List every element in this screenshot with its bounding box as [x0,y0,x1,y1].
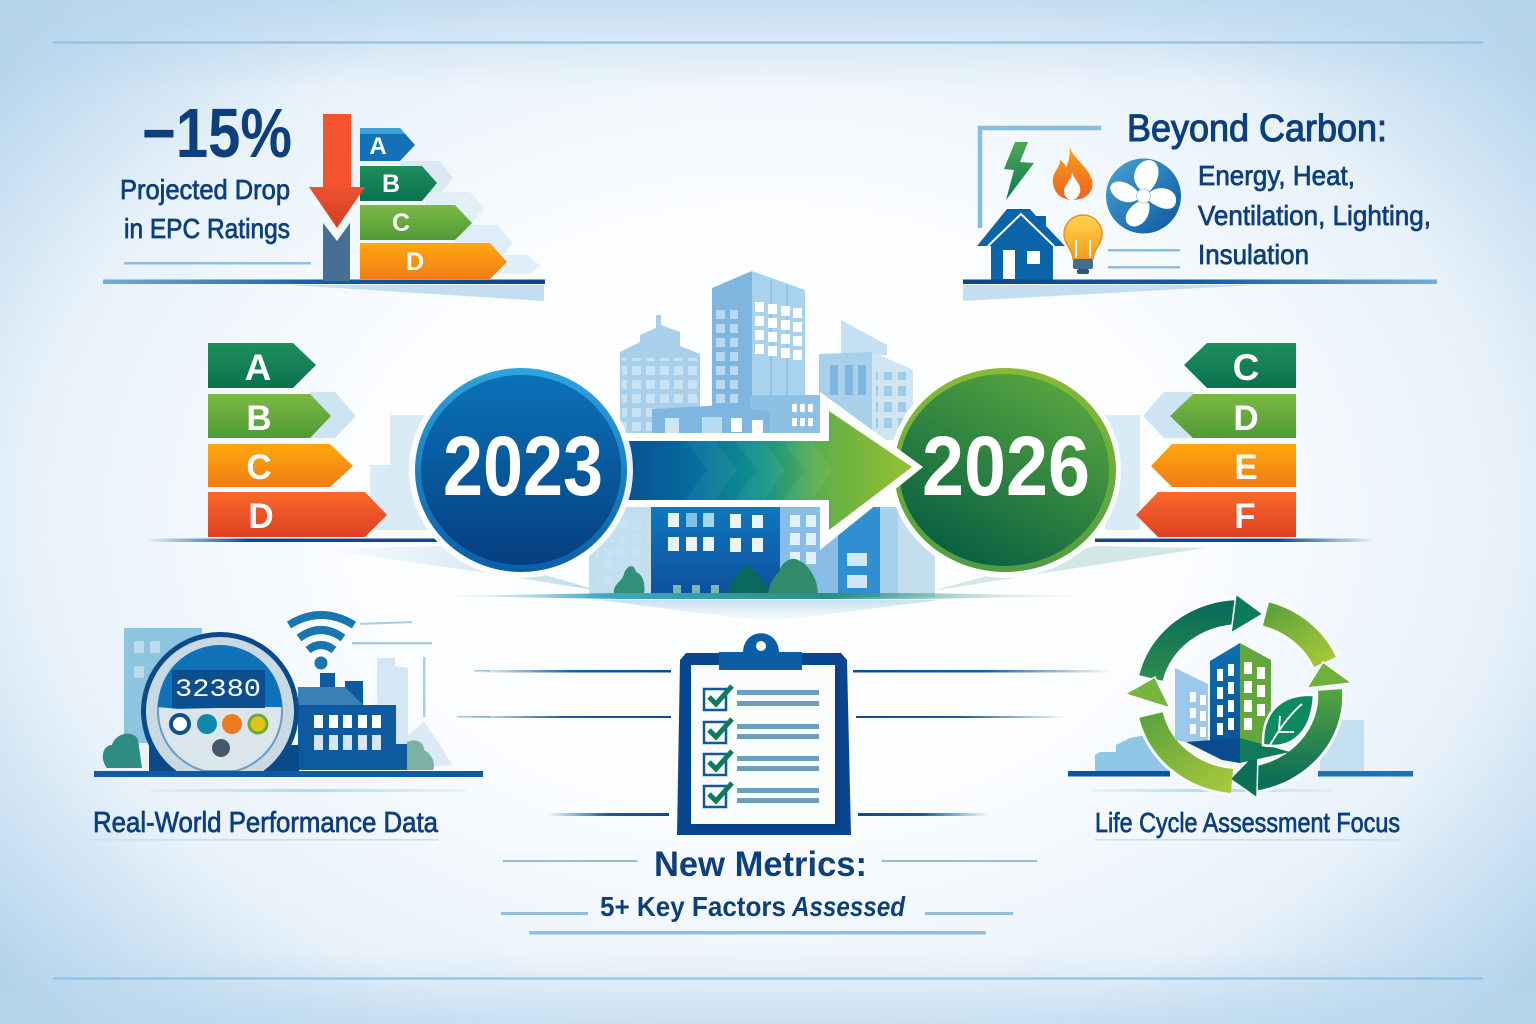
circle: 2026 [889,362,1121,578]
heading: new metrics: New Metrics: [654,845,867,884]
panel: 2023 ratings bars [144,343,600,591]
icon: house [977,209,1065,281]
icon: smart meter [141,632,299,771]
arc: light green top-right [1266,614,1325,662]
panel: 2023 ratings bars: C [246,448,272,487]
background buildings [124,621,490,768]
meter reading: 32380 [175,675,261,704]
panel: 2026 ratings bars [932,343,1376,591]
text: 5+ key factors assessed: Assessed [791,891,906,922]
panel: 2026 ratings bars: E [1234,448,1258,487]
trees [103,734,434,770]
icon: red down arrow [309,114,365,281]
rating bars A to D: B [382,170,400,198]
text: list of factors: Energy, Heat, [1198,160,1355,191]
ground lens [437,593,1092,599]
arrow: 2023 to 2026 [610,392,923,550]
icon: clipboard checklist [677,633,851,835]
label: 2023: 2023 [443,419,603,513]
panel: life cycle assessment [1068,594,1413,840]
panel: new metrics [458,633,1112,934]
icon: green building [1175,643,1290,763]
text: list of factors: Insulation [1198,239,1309,270]
upper left building [620,315,700,440]
checklist rows [704,686,819,807]
panel: 2023 ratings bars: B [246,399,272,438]
rating bars A to D [360,128,542,279]
cycle arrows [1125,594,1352,798]
frame [980,128,1101,228]
text: 5+ key factors assessed: 5+ Key Factors [600,891,786,922]
stat: -15%: −15% [142,94,292,172]
arc: light green bottom-left [1125,677,1232,781]
label: 2026: 2026 [922,419,1090,513]
rating bars A to D: D [406,248,424,276]
rating bars A to D: C [392,209,410,237]
panel: 2023 ratings bars: A [245,347,271,388]
icon: flame [1053,145,1093,200]
icon: light bulb [1064,215,1102,274]
caption: life cycle assessment focus: Life Cycle Assessment Focus [1095,807,1400,838]
caption: real-world performance data: Real-World Performance Data [93,807,439,839]
text: list of factors [1198,160,1431,270]
upper right building [819,320,913,440]
panel: projected EPC drop [103,94,545,301]
text: projected drop in EPC ratings: Projected Drop [120,174,290,205]
icon: leaf [1263,695,1314,746]
illustration: city skyline [437,271,1092,622]
rating bars A to D: A [369,133,387,160]
panel: 2023 ratings bars: D [248,497,274,536]
arc: dark green top-left [1151,594,1263,678]
panel: 2026 ratings bars: F [1234,497,1256,536]
lower buildings [589,507,935,597]
tall tower [712,271,805,440]
circle: 2023 [409,362,633,578]
icon: lightning bolt [1004,142,1034,200]
text: list of factors: Ventilation, Lighting, [1198,200,1431,231]
text: projected drop in EPC ratings [120,174,290,244]
icon: fan [1106,158,1181,234]
low mid buildings [652,395,820,440]
panel: 2026 ratings bars: C [1233,347,1259,388]
trees [614,559,818,595]
text: 5+ key factors assessed [600,891,906,922]
heading: beyond carbon: Beyond Carbon: [1127,108,1387,150]
panel: 2026 ratings bars: D [1233,399,1259,438]
factory [298,673,408,770]
icon: wifi signal [289,615,354,670]
text: projected drop in EPC ratings: in EPC Ratings [124,213,290,244]
arc: green to dark bottom-right [1230,662,1352,798]
panel: real-world performance data [93,615,490,840]
background buildings [1095,720,1364,771]
panel: beyond carbon [963,108,1437,301]
